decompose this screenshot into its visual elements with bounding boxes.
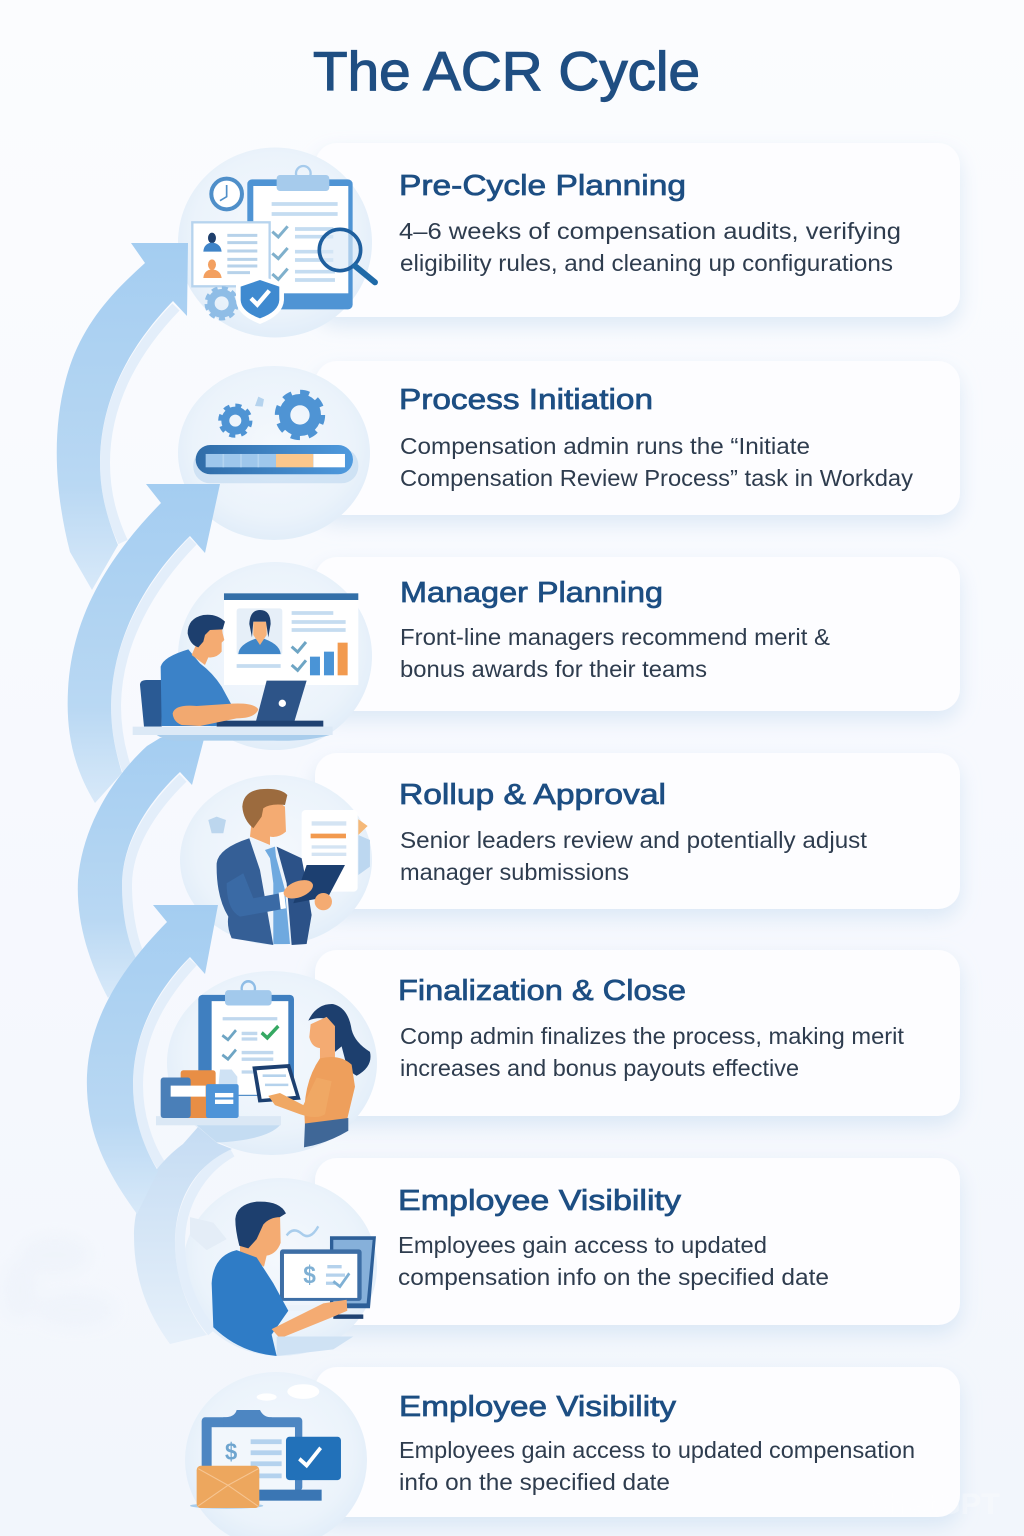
panel: Finalization & Close: Finalization & Close — [398, 975, 686, 1007]
icon: Pre-Cycle Planning documents — [192, 166, 375, 324]
panel: Pre-Cycle Planning: 4–6 weeks of compensation audits, verifying — [399, 218, 901, 244]
panel: Pre-Cycle Planning: Pre-Cycle Planning — [399, 170, 686, 202]
watermark: ChatGPT — [868, 1488, 1000, 1521]
panel: Process Initiation — [315, 361, 960, 515]
icon: finalization clipboard and woman — [156, 981, 371, 1147]
panel: Manager Planning: bonus awards for their teams — [400, 656, 707, 682]
panel: Manager Planning: Front-line managers recommend merit & — [400, 624, 830, 650]
title: The ACR Cycle — [313, 40, 700, 102]
arrow: into Finalization — [87, 905, 218, 1214]
icon: senior leader reviewing tablet — [208, 789, 370, 945]
panel: Manager Planning — [315, 557, 960, 711]
panel: Finalization & Close: increases and bonus payouts effective — [400, 1055, 799, 1081]
icon: compensation statement and envelope — [190, 1384, 341, 1509]
panel: Employee Visibility (first): Employee Visibility — [398, 1185, 682, 1217]
arrow: into Rollup — [78, 735, 205, 998]
arrow: into Manager Planning — [68, 484, 220, 803]
icon: employee at computer — [190, 1202, 376, 1356]
cycle arrows — [57, 243, 232, 1344]
panel: Process Initiation: Compensation Review Process” task in Workday — [400, 465, 913, 491]
panel: Employee Visibility (second): info on the specified date — [399, 1469, 670, 1495]
icon: compensation statement and envelope: $ — [225, 1438, 237, 1465]
icon: employee at computer: $ — [303, 1261, 316, 1290]
arrow: to Employee Visibility tail — [134, 1127, 232, 1344]
panel: Employee Visibility (first) — [315, 1158, 960, 1325]
icon: Process Initiation gears and progress bar — [193, 393, 358, 483]
arrow inner highlights — [105, 307, 232, 1332]
panel: Employee Visibility (second) — [315, 1367, 960, 1517]
panel: Finalization & Close — [315, 950, 960, 1116]
panel: Pre-Cycle Planning — [315, 143, 960, 317]
panel: Employee Visibility (first): compensation info on the specified date — [398, 1264, 829, 1290]
panel: Employee Visibility (first): Employees gain access to updated — [398, 1232, 767, 1258]
arrow: into Pre-Cycle Planning — [57, 243, 188, 590]
icon backdrop circles — [167, 148, 377, 1536]
panel: Finalization & Close: Comp admin finalizes the process, making merit — [400, 1023, 904, 1049]
panel: Rollup & Approval: Senior leaders review and potentially adjust — [400, 827, 867, 853]
panel: Rollup & Approval — [315, 753, 960, 909]
step cards — [315, 143, 960, 1517]
panel: Rollup & Approval: Rollup & Approval — [399, 779, 666, 811]
panel: Employee Visibility (second): Employees gain access to updated compensation — [399, 1437, 915, 1463]
panel: Rollup & Approval: manager submissions — [400, 859, 629, 885]
panel: Employee Visibility (second): Employee Visibility — [399, 1391, 677, 1423]
faint map texture — [2, 1235, 115, 1328]
panel: Process Initiation: Compensation admin runs the “Initiate — [400, 433, 810, 459]
panel: Process Initiation: Process Initiation — [399, 384, 653, 416]
icon: manager at laptop — [133, 593, 358, 741]
panel: Manager Planning: Manager Planning — [400, 577, 663, 609]
panel: Pre-Cycle Planning: eligibility rules, and cleaning up configurations — [400, 250, 893, 276]
